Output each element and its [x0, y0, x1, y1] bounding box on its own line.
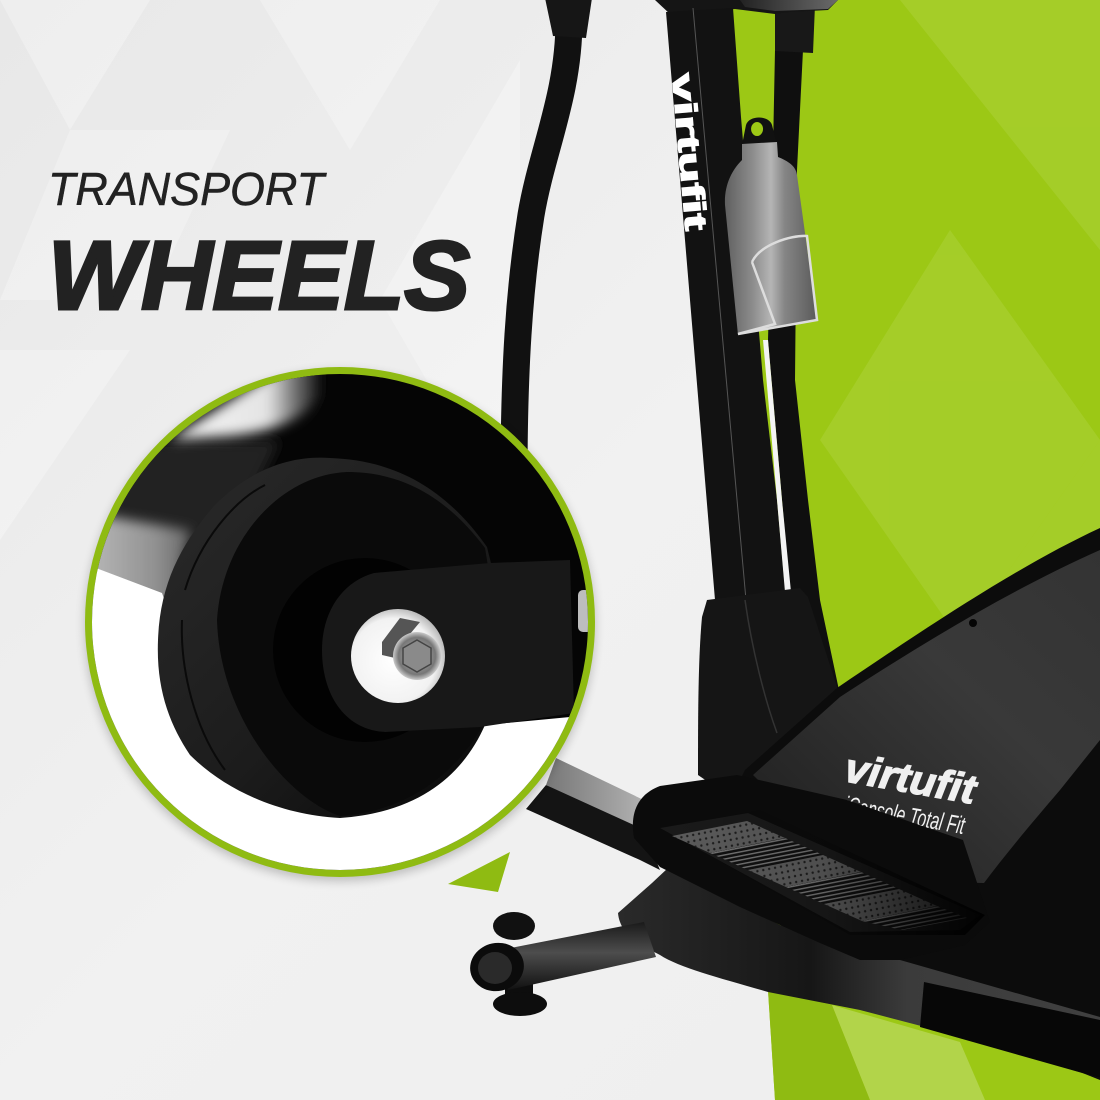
pedal tread	[660, 810, 985, 935]
wheel hub	[217, 472, 500, 816]
icon: water bottle	[725, 118, 817, 335]
wheel inner recess	[273, 558, 406, 742]
front stabilizer arm	[500, 922, 656, 990]
handle collar	[545, 0, 592, 38]
left handlebar tube	[514, 20, 569, 480]
top bracket grey section	[740, 0, 838, 11]
rubber wheel	[158, 458, 510, 818]
green lower facets	[768, 990, 985, 1100]
heading: wheels: WHEELS	[48, 221, 470, 330]
shroud console text: iConsole Total Fit	[842, 791, 968, 840]
background: green panel	[705, 0, 1100, 1100]
brand on shroud: virtufit	[841, 745, 982, 813]
top blurred highlight	[170, 365, 320, 440]
brand on post: virtufit	[665, 72, 714, 232]
heading: transport: TRANSPORT	[48, 163, 327, 215]
wheel groove	[182, 485, 265, 770]
rear stabilizer tube	[526, 758, 660, 870]
frame below pedal	[618, 868, 1100, 1078]
post base cowl	[698, 588, 860, 790]
shroud bolt hole	[969, 619, 977, 627]
callout circle: wheel close-up	[80, 365, 610, 890]
dark blurred frame	[109, 438, 277, 544]
front stabilizer small wheel	[493, 912, 535, 940]
central post	[666, 8, 786, 600]
white floor	[92, 568, 569, 870]
frame black underside	[920, 982, 1100, 1078]
green facets	[820, 0, 1100, 640]
grey blurred bar	[94, 510, 194, 598]
bottle body	[725, 142, 817, 335]
bright pin at right	[578, 590, 588, 632]
stabilizer end cap	[466, 938, 528, 996]
hex socket	[393, 632, 441, 680]
foot pedal	[633, 775, 990, 960]
circle outline	[85, 367, 595, 877]
main shroud	[730, 528, 1100, 1080]
bolt head	[351, 609, 445, 703]
adjustable foot	[493, 975, 547, 1016]
bottle cap loop	[742, 118, 777, 145]
heading	[48, 163, 470, 330]
right handlebar tube	[768, 50, 840, 700]
metal arm	[322, 560, 574, 732]
bottle cage	[738, 236, 817, 334]
photo background	[85, 367, 595, 877]
elliptical machine	[466, 0, 1100, 1080]
shroud lighter panel	[753, 550, 1100, 883]
circle shadow	[85, 371, 595, 881]
bolt chip mark	[382, 618, 420, 658]
post groove	[693, 8, 746, 600]
top bracket	[655, 0, 838, 14]
right collar	[775, 5, 815, 53]
post highlight	[763, 340, 791, 592]
pointer arrow	[448, 852, 510, 892]
background facets	[0, 0, 520, 540]
cowl seam	[745, 600, 777, 733]
